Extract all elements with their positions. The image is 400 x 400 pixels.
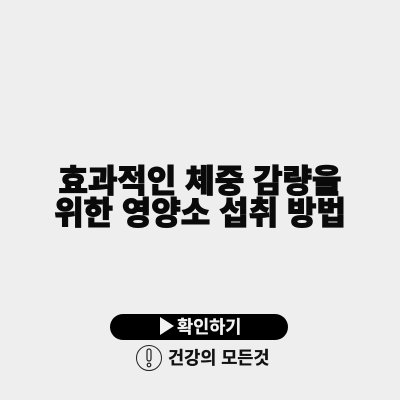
icon: play triangle [160,317,174,335]
icon: exclamation circle [136,345,162,371]
button: 확인하기 [110,314,288,340]
title line 2: 위한 영양소 섭취 방법 [54,188,346,234]
title [54,156,346,234]
button label: 확인하기 [177,314,241,339]
brand name: 건강의 모든것 [168,345,270,370]
title line 1: 효과적인 체중 감량을 [59,156,341,202]
brand row [136,345,270,371]
